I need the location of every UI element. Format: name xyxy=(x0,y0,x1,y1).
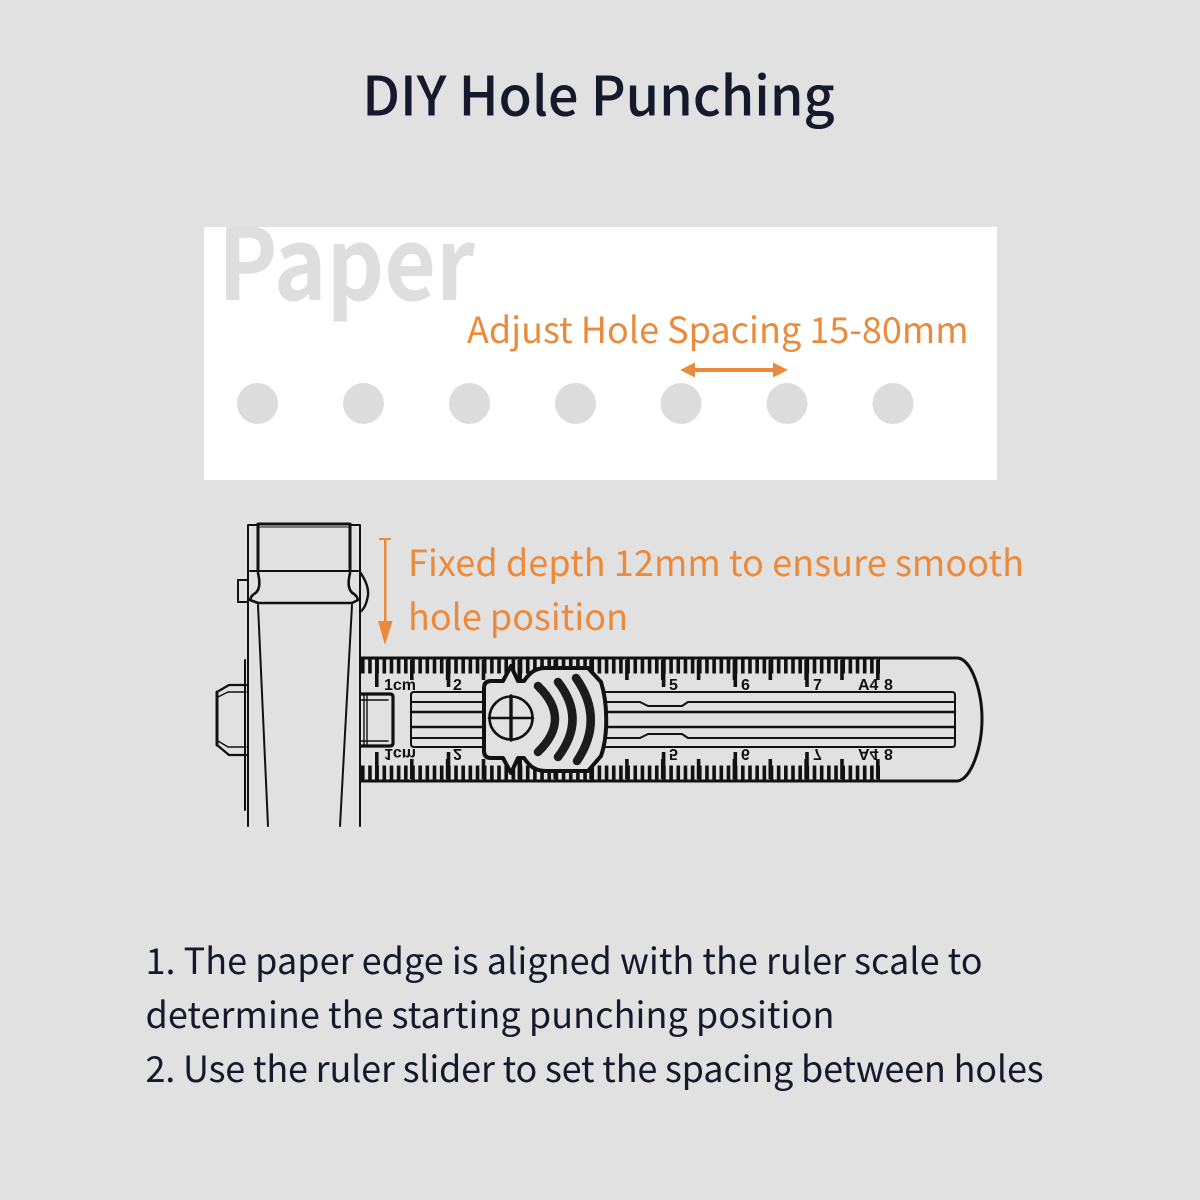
ruler numbers bottom: 7 xyxy=(813,745,822,762)
ruler numbers bottom: 2 xyxy=(453,745,462,762)
instructions xyxy=(146,933,1043,1093)
ruler numbers bottom xyxy=(384,745,893,762)
fixed depth caption: hole position xyxy=(408,589,628,641)
ruler slider xyxy=(484,666,606,773)
punch body xyxy=(238,524,368,826)
ruler numbers top: 1cm xyxy=(384,677,416,694)
slider grip arcs xyxy=(538,678,591,761)
hole punch diagram xyxy=(217,524,982,826)
title: DIY Hole Punching xyxy=(362,52,835,132)
ruler numbers bottom: 5 xyxy=(669,745,678,762)
instructions: determine the starting punching position xyxy=(146,987,834,1039)
fixed depth caption: Fixed depth 12mm to ensure smooth xyxy=(408,535,1024,587)
ruler numbers bottom: 6 xyxy=(741,745,750,762)
slider screw xyxy=(489,696,533,740)
ruler numbers bottom: A4 xyxy=(858,745,879,762)
ruler numbers bottom: 8 xyxy=(884,745,893,762)
ruler ticks bottom xyxy=(361,766,880,772)
ruler numbers top: A4 xyxy=(858,677,879,694)
arrow: fixed depth xyxy=(378,538,392,645)
ruler ticks top xyxy=(361,666,880,673)
ruler xyxy=(361,658,982,781)
fixed depth caption xyxy=(408,535,1024,641)
ruler numbers top: 2 xyxy=(453,677,462,694)
spacing caption: Adjust Hole Spacing 15-80mm xyxy=(467,302,969,354)
arrow: hole spacing xyxy=(680,362,788,378)
ruler numbers top: 8 xyxy=(884,677,893,694)
instructions: 1. The paper edge is aligned with the ruler scale to xyxy=(146,933,983,985)
instructions: 2. Use the ruler slider to set the spacing between holes xyxy=(146,1041,1043,1093)
punch knob left xyxy=(217,660,246,810)
ruler numbers top: 7 xyxy=(813,677,822,694)
ruler numbers top: 6 xyxy=(741,677,750,694)
ruler outline xyxy=(361,658,982,781)
punch knob right xyxy=(361,694,393,746)
ruler numbers bottom: 1cm xyxy=(384,745,416,762)
punched holes row xyxy=(237,383,914,424)
ruler numbers top xyxy=(384,677,893,694)
ruler slot xyxy=(411,692,955,747)
ruler numbers top: 5 xyxy=(669,677,678,694)
panel: paper sheet xyxy=(204,184,997,480)
